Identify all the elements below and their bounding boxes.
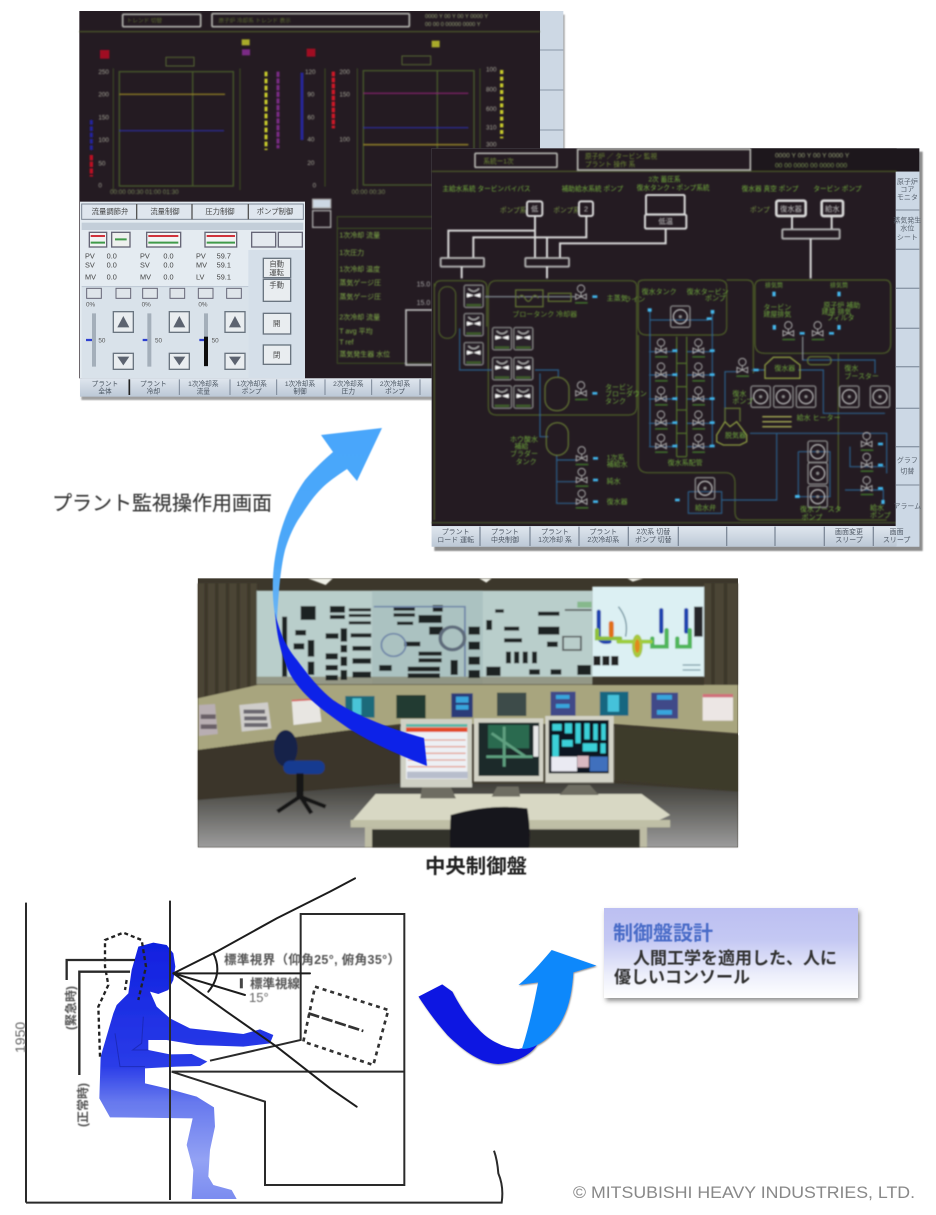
parameter table: 蒸気ゲージ圧 [339,292,381,301]
diagram component labels: 復水タンク [642,287,677,296]
slider scales: 50 [98,337,106,344]
panel: plant trend monitoring screen [79,11,565,400]
card body text: 優しいコンソール [614,968,750,987]
slider scales: 0% [198,302,208,309]
operation console panel: ポンプ制御 [257,207,293,216]
bright plant status display [592,587,704,677]
diagram header text [483,151,850,169]
console value rows: PV [85,251,95,260]
bottom function keys: プラント [491,528,519,536]
bottom function keys: 制御 [293,386,307,395]
sight lines [173,878,357,1107]
bottom function keys [432,527,910,547]
bottom function keys: ポンプ [385,387,405,395]
trend axis values: 150 [98,114,109,121]
diagram header boxes [475,149,750,170]
arrow: control room to monitoring screen [273,428,427,766]
parameter table: 1次冷却 温度 [339,265,380,274]
diagram component labels: 復水ブースタ [800,505,842,514]
bottom function keys: 1次冷却 系 [538,535,572,544]
wall console screens [345,692,733,721]
operation console panel: 流量調節弁 [92,207,128,216]
section headings: 復水器 真空 ポンプ [742,184,799,193]
console value rows: 0.0 [163,272,174,281]
right side function buttons: グラフ [897,456,918,465]
heat exchangers and tanks [516,290,831,457]
parameter table: 15.0 [417,300,430,307]
slider scales [86,302,219,367]
parameter table: 2次冷却 流量 [339,312,380,321]
console value rows: 59.7 [217,251,231,260]
panel: plant system diagram screen: 復水器 [780,204,803,213]
bottom function keys: 2次系 切替 [636,527,670,536]
trend axis values: 0 [313,182,317,189]
diagram component labels: 脱気器 [725,430,746,439]
diagram component labels: 純水 [607,476,621,485]
diagram component labels: 復水 [732,389,746,398]
diagram component labels: 復水タービン [687,287,729,296]
photo: central control room [198,578,738,847]
section headings: 2次 蓄圧系 [648,175,681,184]
diagram component labels: 復水系配管 [668,458,703,467]
diagram component labels: ホウ酸水 [510,435,538,444]
diagram component labels: タービン [605,382,633,391]
card: console design [604,908,858,998]
arrow: diagram to console design card [418,950,596,1064]
angle marker [237,978,246,988]
trend chart left [113,57,240,190]
right side console buttons: 閉 [273,350,280,359]
trend axis values: 120 [305,69,316,76]
right side function buttons: 蒸気発生 [893,216,921,225]
diagram component labels: 給水弁 [695,503,716,512]
bottom function keys: 圧力 [342,386,355,395]
console value rows: SV [140,261,150,270]
diagram component labels: 復水器 [607,497,628,506]
section headings: 補助給水系統 ポンプ [562,184,624,193]
bottom function keys: プラント [92,380,118,388]
parameter table: T avg 平均 [339,326,373,335]
trend axis values: 00:00 00:30 01:00 01:30 [110,189,179,196]
diagram component labels: 排気筒 [765,281,783,289]
diagram component labels: タービン [763,302,791,311]
valves [575,285,883,509]
diagram component labels: ポンプ [870,511,891,519]
bottom function keys: ポンプ [242,387,262,395]
large wall mimic panel [257,591,592,687]
diagram component labels [510,281,891,521]
section headings: 復水タンク・ポンプ系統 [637,183,710,192]
console value rows: 0.0 [107,251,117,260]
bottom function keys: 画面 [890,528,904,536]
trend axis values: 800 [486,87,497,94]
trend axis values: 200 [339,69,350,76]
parameter table: T ref [339,339,354,346]
beige console wall [198,685,738,750]
trend axis values: 100 [98,137,109,144]
panel: plant system diagram screen: 給水 [825,204,840,213]
right side function buttons: 水位 [900,224,914,233]
bottom function keys: 中央制御 [491,535,519,544]
trend axis values: 40 [307,137,315,144]
diagram component labels: 1次系 [607,453,625,462]
screen 1 header boxes [123,14,409,27]
trend axis values: 50 [98,161,106,168]
diagram component labels: 復水器 [774,364,795,373]
panel: plant system diagram screen: 低 [531,205,539,214]
right side console buttons: 開 [273,319,280,328]
trend axis values: 20 [307,160,315,167]
structure lines [26,901,502,1203]
section headings [442,175,862,215]
trend axis values: 300 [486,142,497,149]
bottom function keys: プラント [541,528,569,536]
cyan indicators [648,292,885,504]
section headings: 主給水系統 タービンバイパス [442,184,531,193]
front chair back [450,807,530,847]
console value rows: MV [85,272,96,281]
bottom function keys: スリープ [883,536,910,544]
diagram component labels: ライン [624,296,645,304]
operator chair blue [274,730,326,813]
small selector box [313,199,331,227]
console value rows [85,251,231,281]
section headings: ポンプ系 [500,206,527,215]
bottom function keys: 冷却 [147,386,160,395]
bottom function keys: 1次冷却系 [237,379,267,388]
card body text: 人間工学を適用した、人に [633,948,837,968]
white header piping [441,195,843,278]
slider scales: 50 [212,337,219,344]
screen 1 status text: 0000 Y 00 Y 00 Y 0000 Y [425,14,488,20]
fans and motors [671,306,890,507]
panel: plant system diagram screen [432,148,923,551]
bottom function keys: 1次冷却系 [285,379,316,388]
bottom function keys: プラント [442,528,470,536]
trend axis values: 90 [307,92,315,99]
console value rows: SV [85,261,95,270]
text: height 1950: 1950 [12,1022,28,1053]
process piping blue and gray [460,297,887,513]
diagram component labels: 復水 [844,364,858,373]
trend axis values: 00:00 00:30 [352,189,386,196]
slider scales: 50 [155,337,163,344]
bottom function keys: 2次冷却系 [587,535,619,544]
bottom function keys: スリープ [835,536,863,544]
dashed screen line [308,1013,363,1031]
olive system boundaries [432,280,897,523]
trend axis values: 200 [98,92,109,99]
label: central control board: 中央制御盤 [425,855,527,878]
console value rows: PV [196,251,206,260]
bottom function keys: 画面変更 [835,527,863,536]
console value rows: 0.0 [107,261,117,270]
bottom function keys: 2次冷却系 [380,379,411,388]
diagram header text: 原子炉 ／ タービン 監視 [585,151,657,160]
text: emergency position: (緊急時) [63,986,78,1030]
wall posted sheets [199,698,321,736]
screen 1 status text: トレンド 切替 [127,17,163,25]
three operator monitors [401,716,614,798]
diagram component labels: 補給 [514,441,528,450]
diagram header text: 0000 Y 00 Y 00 Y 0000 Y [775,152,850,159]
diagram component labels: 建屋排気 [763,310,791,319]
console value rows: 0.0 [107,272,117,281]
console value rows: LV [196,272,205,281]
diagram component labels: ブローダウン [605,389,647,398]
right side function buttons: シート [897,234,918,241]
console value rows: 59.1 [217,272,231,281]
right side console buttons: 手動 [269,280,284,289]
text: standard line of sight: 標準視線 [250,976,301,991]
copyright: © MITSUBISHI HEAVY INDUSTRIES, LTD. [573,1184,915,1202]
parameter table [337,217,438,365]
trend axis values: 150 [339,92,350,99]
slider scales: 0% [86,302,96,309]
right side function buttons: アラーム [893,503,921,511]
trend axis values: 600 [486,106,497,113]
trend chart right [325,56,480,190]
center desk [351,794,670,847]
height brackets [67,960,135,1075]
bottom function keys: 全体 [98,386,112,395]
console value rows: 0.0 [163,261,174,270]
parameter table: 1次圧力 [339,248,364,257]
diagram component labels: フィルタ [827,313,854,322]
diagram component labels: ブロータンク 冷却器 [512,310,577,319]
dashed alternate posture outline [98,933,146,1057]
diagram component labels: ポンプ [732,397,753,405]
diagram component labels: タンク [605,396,626,405]
section headings: タービン ポンプ [813,184,862,193]
panel: plant system diagram screen: 低温 [658,217,674,226]
trend axis values: 60 [307,114,315,121]
console value rows: MV [196,261,207,270]
trend axis values: 250 [98,69,109,76]
text: normal position: (正常時) [75,1083,90,1127]
bottom function keys: プラント [140,380,167,388]
operation console panel: 圧力制御 [205,207,235,216]
console value rows: 0.0 [163,251,174,260]
trend axis values [98,67,497,196]
bottom function keys: ロード 運転 [437,535,474,544]
bottom function keys: 流量 [197,386,210,395]
seated operator silhouette [99,943,273,1199]
bottom function keys [80,378,432,397]
body inner contour [115,1017,148,1067]
parameter table: 1次冷却 流量 [339,230,380,239]
colored trend scales [91,39,502,177]
diagram component labels: 給水 [870,503,884,512]
parameter table: 15.0 [417,282,430,289]
trend axis values: 100 [486,67,497,74]
diagram component labels: ポンプ [705,295,726,303]
bottom function keys: 2次冷却系 [333,379,364,388]
right side function buttons [893,172,921,547]
up and down operation buttons [113,312,245,369]
right side function buttons: 切替 [900,466,914,475]
right side function buttons: コア [900,186,914,194]
parameter table: 蒸気発生器 水位 [339,350,390,359]
diagram header text: 系統ー1次 [483,156,514,165]
console value rows: MV [140,272,151,281]
console value rows: PV [140,251,150,260]
diagram component labels: 給水 ヒーター [797,413,841,422]
diagram component labels: ブースター [844,371,879,380]
diagram component labels: ブラダー [510,449,538,458]
text: standard field of view: 標準視界（仰角25°, 俯角35°） [224,952,400,967]
bottom function keys: プラント [589,528,617,536]
bottom function keys: 1次冷却系 [188,379,219,388]
panel: plant system diagram screen: 2 [584,205,588,214]
diagram component labels: 排気筒 [830,281,848,289]
dashed tilted console [303,987,388,1065]
right side console buttons [263,258,291,364]
right side function buttons: 原子炉 [897,177,918,186]
parameter table: 蒸気ゲージ圧 [339,278,381,287]
screen 1 status text [127,14,488,28]
slider scales: 0% [142,302,151,309]
screen 1 status text: 00 00 0 00000 0000 Y [425,22,481,28]
card heading: 制御盤設計 [613,922,713,945]
diagram header text: プラント 操作 系 [585,160,636,169]
right side console buttons: 運転 [269,268,285,277]
operation console panel: 流量制御 [150,207,180,216]
text: 15 degrees: 15° [249,990,269,1005]
section headings: ポンプ [750,206,770,214]
diagram component labels: 補給水 [607,460,628,469]
floor [198,783,738,847]
bottom function keys: ポンプ 切替 [635,535,672,544]
diagram component labels: 原子炉 補助 [823,300,860,309]
diagram header text: 00 00 0000 00 0000 000 [775,162,847,169]
trend axis values: 310 [486,124,497,131]
diagram component labels: 主蒸気 [607,294,628,303]
screen 1 status text: 原子炉 冷却系 トレンド 表示 [218,17,291,25]
console value rows: 59.1 [217,261,231,270]
right side function buttons: モニタ [897,192,918,201]
diagram component labels: 建屋 排気 [822,307,852,316]
pump group left [464,285,533,408]
section headings: ポンプ系 [553,206,580,215]
diagram component labels: タンク [516,457,537,466]
right side console buttons: 自動 [269,260,284,269]
diagram component labels: ポンプ [802,513,822,521]
label: plant monitoring screen: プラント監視操作用画面 [52,492,272,515]
room ceiling and curtains [198,578,738,698]
operation console panel [80,202,432,397]
trend axis values: 100 [339,137,350,144]
trend axis values: 0 [98,182,102,189]
figure: ergonomic console diagram [26,878,502,1203]
